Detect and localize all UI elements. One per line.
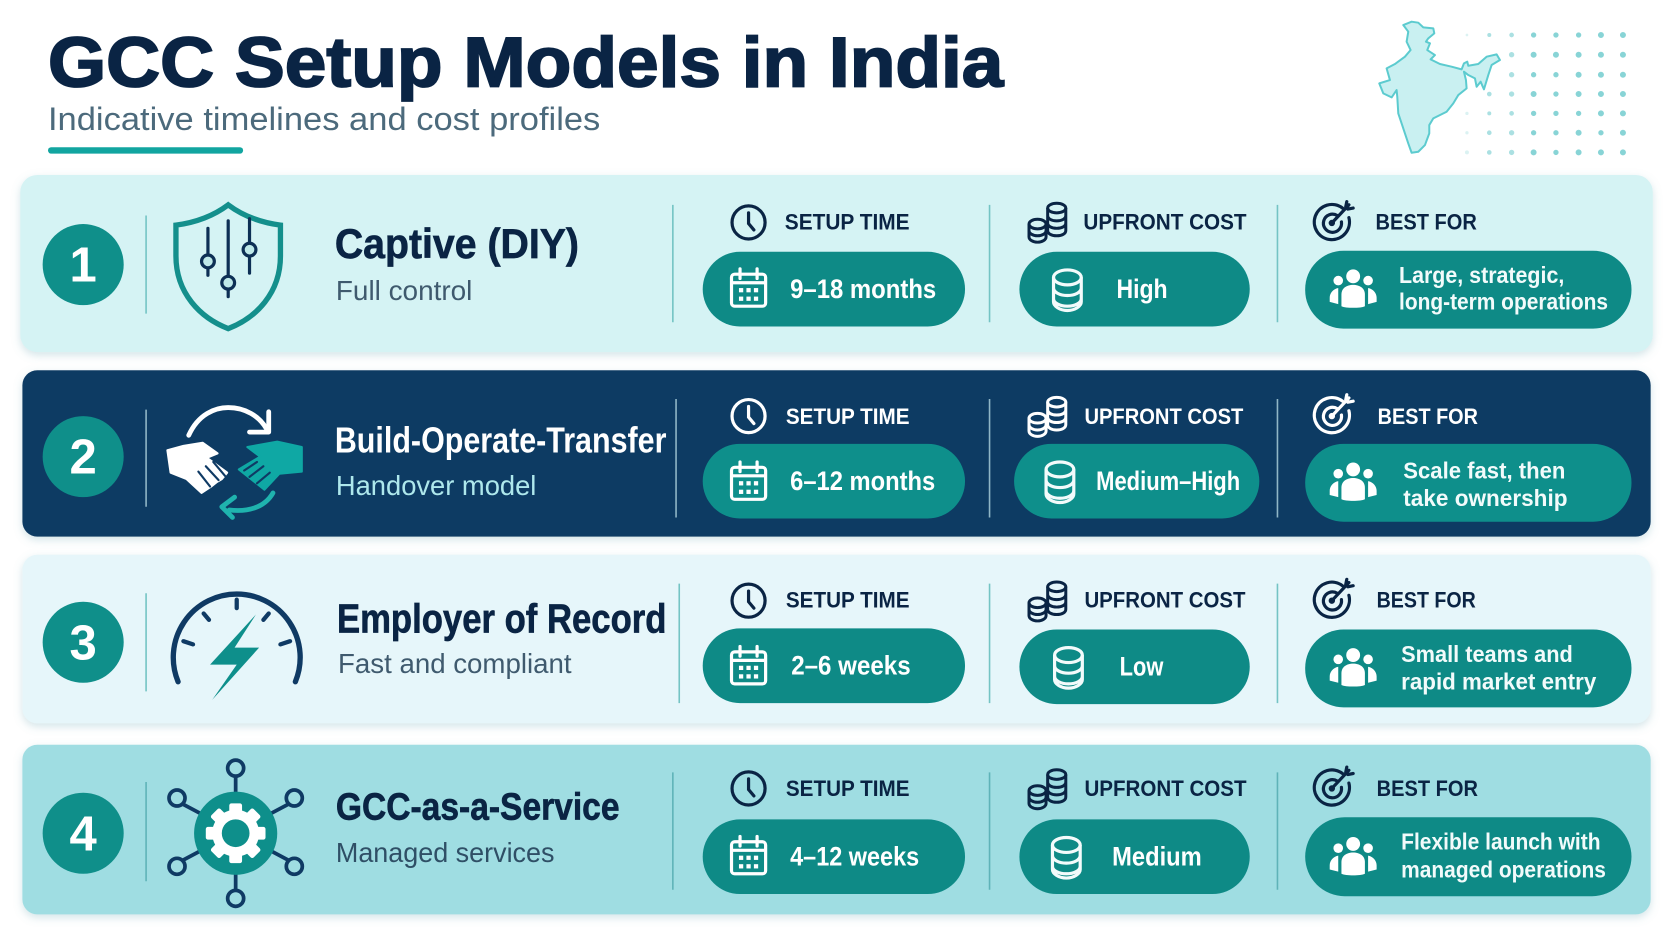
setup time: 4–12 weeks: [790, 842, 919, 872]
upfront cost: [1019, 770, 1250, 894]
title: GCC Setup Models in India: [48, 22, 1004, 101]
best for: BEST FOR: [1377, 587, 1476, 612]
number badge 4: [43, 793, 124, 874]
setup time: [703, 772, 965, 894]
tagline: Handover model: [336, 470, 536, 501]
name: GCC-as-a-Service: GCC-as-a-Service: [336, 785, 620, 828]
best for: take ownership: [1403, 485, 1568, 511]
name: Captive (DIY): Captive (DIY): [335, 220, 579, 267]
name: Employer of Record: Employer of Record: [337, 596, 666, 642]
panel: Employer of Record: [22, 555, 1651, 723]
setup time: 2–6 weeks: [791, 651, 911, 681]
upfront cost: [1019, 203, 1250, 326]
setup time: [703, 206, 965, 326]
number badge 2: 2: [70, 431, 97, 485]
title underline: [48, 147, 243, 154]
upfront cost: High: [1116, 274, 1168, 304]
upfront cost: UPFRONT COST: [1084, 776, 1247, 801]
best for: rapid market entry: [1401, 669, 1596, 695]
setup time: SETUP TIME: [786, 587, 910, 612]
upfront cost: Low: [1120, 652, 1164, 682]
setup time: 9–18 months: [790, 274, 936, 304]
map of India with dot pattern: [1379, 22, 1626, 155]
icon: shield with sliders: [176, 205, 280, 329]
tagline: Full control: [336, 275, 472, 306]
upfront cost: UPFRONT COST: [1084, 404, 1244, 429]
number badge 4: 4: [70, 807, 98, 861]
upfront cost: UPFRONT COST: [1084, 587, 1246, 612]
number badge 1: [43, 224, 124, 305]
tagline: Fast and compliant: [338, 648, 572, 679]
upfront cost: UPFRONT COST: [1083, 210, 1247, 235]
best for: Flexible launch with: [1401, 829, 1601, 855]
best for: managed operations: [1401, 856, 1606, 882]
upfront cost: Medium: [1112, 842, 1202, 872]
setup time: SETUP TIME: [786, 404, 910, 429]
name: Build-Operate-Transfer: Build-Operate-Transfer: [335, 419, 666, 460]
best for: BEST FOR: [1377, 776, 1478, 801]
dot grid: [1465, 32, 1626, 155]
best for: Small teams and: [1401, 641, 1573, 667]
panel: Build-Operate-Transfer: [22, 370, 1651, 537]
India outline: [1379, 22, 1500, 153]
icon: gear with network nodes: [169, 760, 302, 906]
icon: speedometer with lightning bolt: [173, 594, 300, 700]
best for: Large, strategic,: [1399, 262, 1564, 288]
best for: [1305, 395, 1631, 522]
panel: Captive (DIY): [20, 175, 1653, 352]
best for: [1305, 767, 1631, 896]
panel: GCC-as-a-Service: [22, 745, 1651, 914]
icon: handshake with arrows: [167, 408, 302, 517]
upfront cost: [1019, 582, 1250, 704]
best for: [1305, 202, 1631, 329]
setup time: SETUP TIME: [785, 210, 910, 235]
best for: BEST FOR: [1378, 404, 1478, 429]
number badge 3: [43, 602, 124, 683]
number badge 2: [43, 416, 124, 497]
best for: long-term operations: [1399, 289, 1608, 315]
setup time: 6–12 months: [790, 466, 935, 496]
upfront cost: [1014, 397, 1259, 519]
number badge 3: 3: [70, 616, 97, 670]
number badge 1: 1: [70, 239, 97, 293]
best for: Scale fast, then: [1403, 457, 1565, 483]
setup time: SETUP TIME: [786, 776, 910, 801]
tagline: Managed services: [336, 837, 554, 868]
setup time: [703, 400, 965, 519]
best for: [1305, 579, 1631, 707]
upfront cost: Medium–High: [1096, 466, 1240, 496]
subtitle: Indicative timelines and cost profiles: [48, 101, 600, 137]
best for: BEST FOR: [1376, 210, 1477, 235]
setup time: [703, 584, 965, 703]
